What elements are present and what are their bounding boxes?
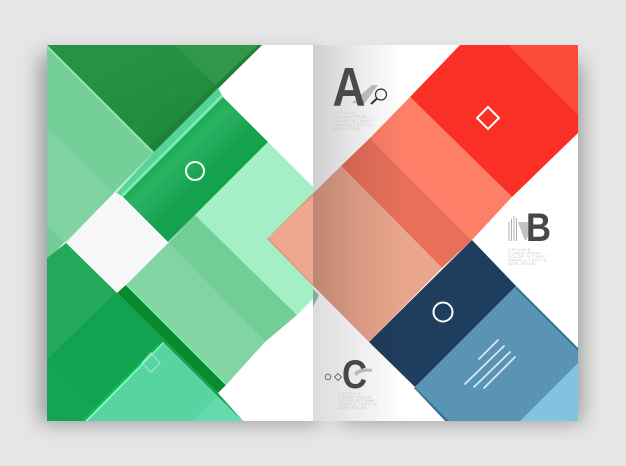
caption A: NEW IPSUM (333, 126, 360, 131)
caption B: LOREM IPSUM (508, 250, 541, 256)
bright strip (117, 88, 223, 197)
lighter fold area at bottom (313, 286, 403, 421)
dark salmon band (341, 138, 472, 268)
icon: four diagonal lines (465, 340, 515, 388)
icon: small diamond (334, 374, 342, 380)
page fold gradient (313, 45, 403, 421)
caption A: OPTION A (333, 110, 356, 115)
section C: C (342, 353, 367, 397)
salmon band (370, 97, 512, 240)
section A (332, 56, 386, 131)
icon: circle on navy (434, 302, 452, 322)
caption C: LOREM IPSUM (338, 394, 371, 400)
mint triangle (81, 342, 243, 421)
panel: right page white (313, 45, 578, 421)
caption B: OPTION B (508, 247, 531, 252)
caption C: NEW IPSUM (338, 405, 365, 410)
navy block (369, 240, 516, 387)
caption B: DOLOR SIT AMET (508, 254, 548, 259)
caption A: LOREM IPSUM (333, 114, 366, 119)
green overlap slice (313, 289, 319, 307)
section B: B (526, 206, 551, 250)
caption A: DOLOR SIT AMET (333, 118, 373, 123)
lower left green block (47, 243, 243, 421)
caption B: NEW IPSUM (508, 261, 535, 266)
icon: vertical bars (509, 216, 516, 241)
medium green band (168, 215, 297, 342)
icon: small circle (325, 374, 331, 380)
section B (508, 206, 551, 266)
caption C: DOLOR SIT AMET (338, 398, 378, 403)
white diamond (66, 193, 118, 243)
icon: magnifier (371, 89, 386, 104)
icon: faint square (142, 353, 160, 372)
caption B: SAMPLE TEXT IS (508, 258, 547, 262)
red block (410, 45, 578, 197)
green rectangle (123, 97, 268, 242)
caption A: SAMPLE TEXT IS (333, 122, 372, 127)
section C (325, 353, 378, 410)
light green band (127, 243, 265, 384)
light blue corner (520, 363, 578, 421)
blue block (414, 286, 578, 421)
light green left triangle (47, 45, 154, 260)
panel: left page green (47, 45, 313, 421)
icon: diamond on red (477, 107, 499, 129)
dark green band (117, 284, 227, 393)
brochure spread (28, 42, 594, 436)
dark green top triangle (47, 45, 262, 152)
section A: A (332, 56, 366, 118)
icon: circle on green (186, 162, 204, 180)
tan band (313, 166, 442, 342)
caption C: OPTION C (338, 391, 361, 396)
caption C: SAMPLE TEXT IS (338, 402, 377, 406)
mint rectangle (195, 142, 313, 315)
page shadows (40, 55, 582, 423)
salmon on left page (267, 193, 313, 285)
